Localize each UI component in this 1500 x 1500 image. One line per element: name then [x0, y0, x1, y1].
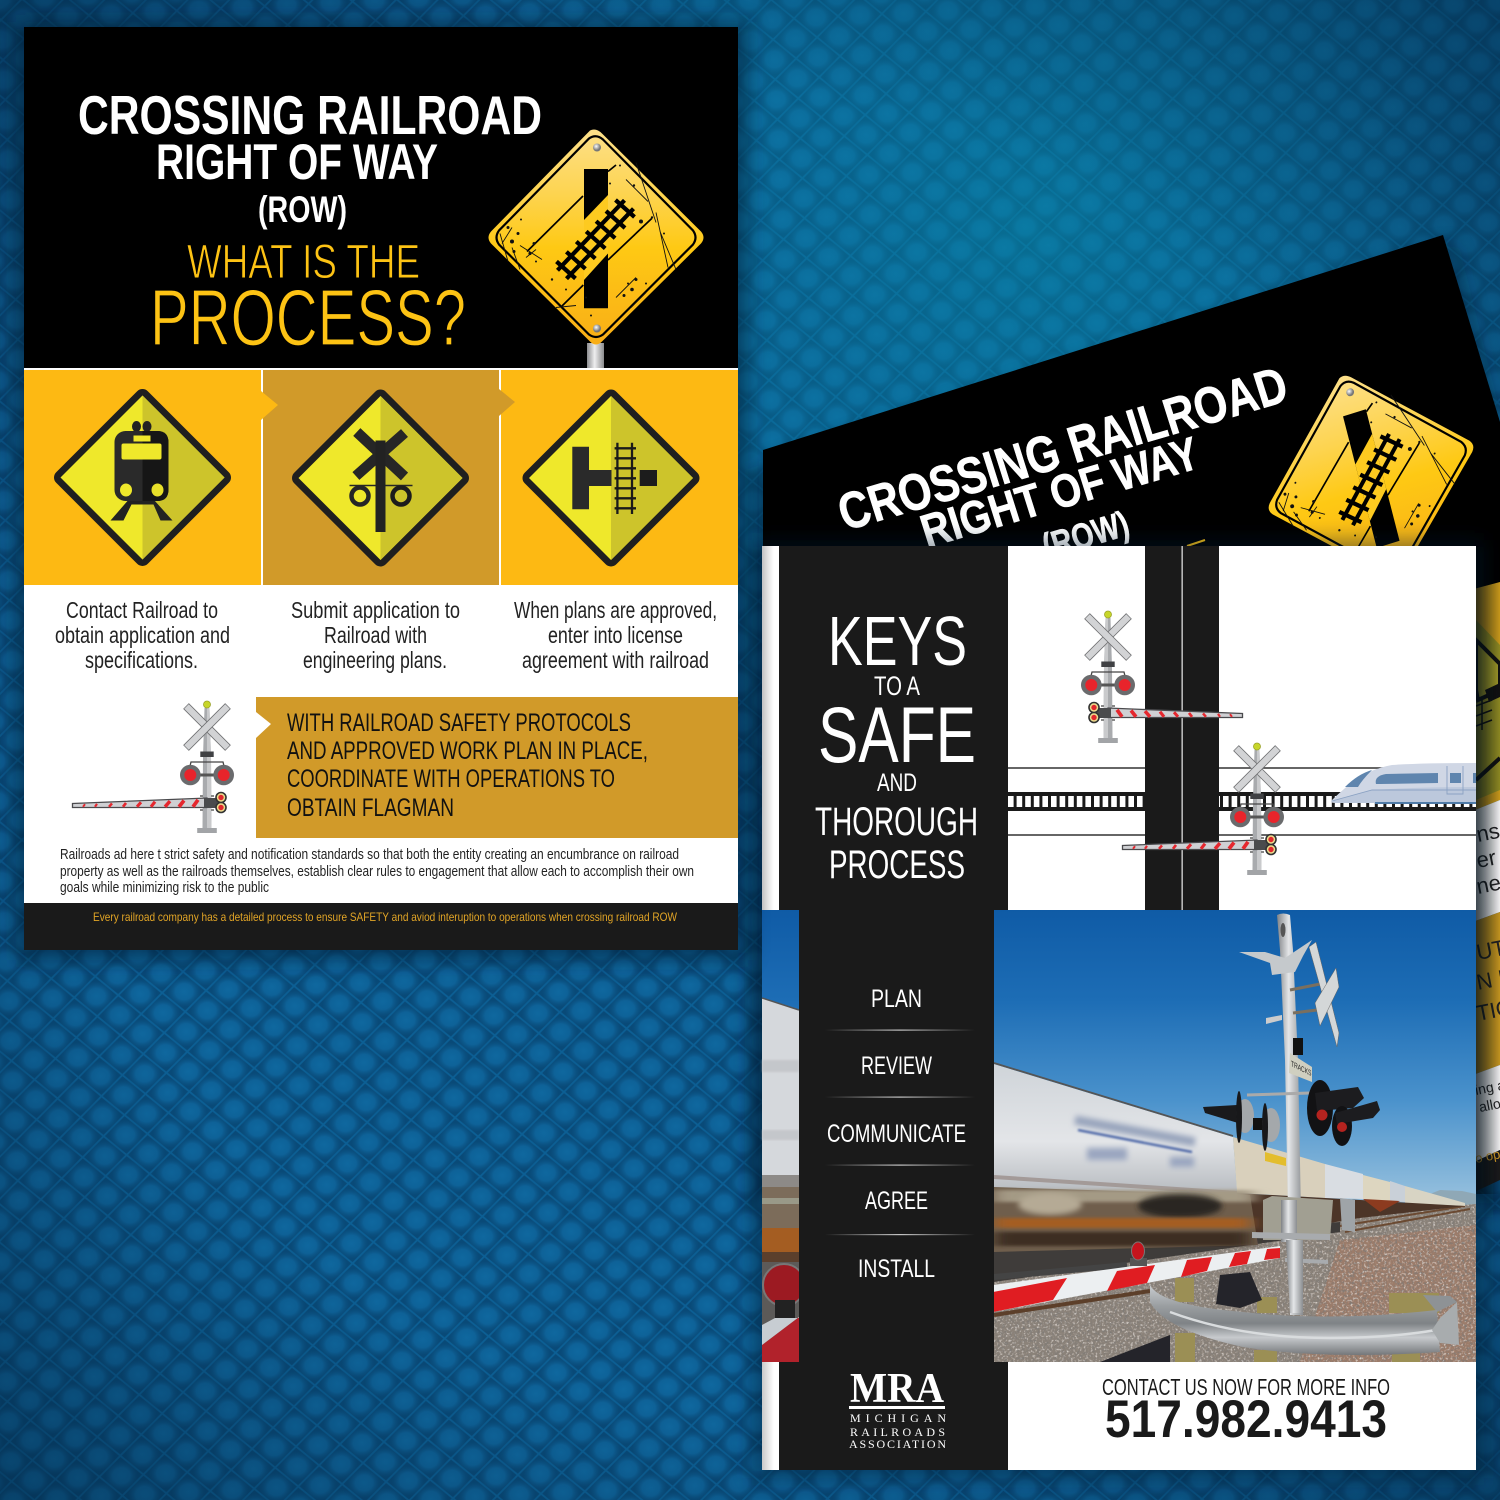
heading: keys to a safe and thorough process: PROCESS	[829, 843, 965, 887]
photo: train passing crossing, left sliver	[762, 910, 805, 1362]
control box and brackets	[1252, 1196, 1355, 1313]
signal mast	[1203, 914, 1380, 1315]
process steps list: COMMUNICATE	[827, 1120, 966, 1148]
text: safety paragraph: property as well as the railroads themselves, establish clear rules to engagement that allow each to accomplish their own	[60, 863, 694, 880]
heading: keys to a safe and thorough process: KEYS	[828, 602, 967, 680]
text: step 3: When plans are approved,	[514, 597, 717, 623]
callout: flagman banner: OBTAIN FLAGMAN	[287, 794, 454, 822]
text: step 2: engineering plans.	[303, 647, 447, 673]
photo: train passing crossing	[993, 910, 1476, 1362]
step panels	[24, 370, 738, 585]
icon: railroad crossing sign	[298, 396, 462, 560]
left signal lamps	[1203, 1091, 1280, 1151]
heading: what is the process: WHAT IS THE	[187, 236, 420, 289]
process steps list	[825, 985, 975, 1283]
shadow on ground	[1100, 1272, 1262, 1362]
tilted poster road sign	[1243, 344, 1499, 610]
heading: keys to a safe and thorough process: AND	[877, 769, 917, 797]
sidebar over photo	[799, 910, 994, 1362]
logo: Michigan Railroads Association: MICHIGAN	[850, 1411, 946, 1425]
logo: Michigan Railroads Association: RAILROADS	[850, 1425, 945, 1439]
railway track band	[1008, 792, 1476, 811]
footer bar	[24, 903, 738, 950]
contact block: CONTACT US NOW FOR MORE INFO	[1102, 1374, 1390, 1400]
callout: flagman banner: WITH RAILROAD SAFETY PROTOCOLS	[287, 709, 631, 737]
icon: road sign on post	[488, 130, 704, 368]
heading: keys to a safe and thorough process: SAFE	[818, 690, 976, 779]
text: step 1: Contact Railroad to	[66, 597, 218, 623]
text: step 3	[514, 597, 717, 673]
text: safety paragraph: goals while minimizing risk to the public	[60, 879, 269, 896]
heading: keys to a safe and thorough process: TO A	[874, 671, 920, 701]
arrow: step 2 to step 3	[499, 389, 515, 416]
tilted poster title	[831, 355, 1294, 567]
guard rail	[1150, 1285, 1459, 1355]
tilted poster title: RIGHT OF WAY	[914, 427, 1205, 558]
logo: Michigan Railroads Association: ASSOCIATION	[849, 1437, 946, 1451]
blurred freight train	[994, 1063, 1465, 1252]
heading: what is the process	[150, 236, 466, 362]
heading: crossing railroad right of way: (ROW)	[258, 189, 347, 230]
heading: keys to a safe and thorough process	[815, 602, 978, 887]
callout: flagman banner: COORDINATE WITH OPERATIONS TO	[287, 765, 615, 793]
footer bar: Every railroad company has a detailed process to ensure SAFETY and aviod interuption to operations when crossing railroad ROW	[93, 910, 678, 924]
text: step 2: Railroad with	[324, 622, 427, 648]
heading: crossing railroad right of way: CROSSING RAILROAD	[78, 84, 542, 146]
panel: tilted back poster	[752, 235, 1500, 1210]
process steps list: REVIEW	[861, 1052, 932, 1080]
dark vertical band	[1145, 546, 1219, 910]
railway scene illustration	[1008, 763, 1476, 835]
number of tracks sign	[1289, 1038, 1312, 1082]
panel: main poster	[16, 22, 748, 960]
logo: Michigan Railroads Association	[849, 1366, 946, 1451]
icon: crossing signal left	[1081, 611, 1242, 743]
number of tracks sign: TRACKS	[1291, 1059, 1311, 1078]
right signal lamps	[1307, 1080, 1380, 1146]
contact block: 517.982.9413	[1105, 1390, 1387, 1449]
icon: train warning sign	[60, 396, 224, 560]
logo: Michigan Railroads Association: MRA	[850, 1366, 945, 1412]
icon: side road and track sign	[529, 396, 693, 560]
text: safety paragraph: Railroads ad here t strict safety and notification standards so that both the entity creating an encumbrance on railroad	[60, 846, 679, 863]
right edge strip of back poster	[1470, 582, 1500, 1194]
callout: flagman banner: AND APPROVED WORK PLAN IN PLACE,	[287, 737, 648, 765]
text: step 2	[291, 597, 460, 673]
callout: flagman banner	[256, 697, 738, 838]
text: step 1: specifications.	[85, 647, 198, 673]
ground and gravel	[994, 1204, 1476, 1362]
heading: crossing railroad right of way: RIGHT OF WAY	[156, 134, 438, 190]
text: step 2: Submit application to	[291, 597, 460, 623]
panel: dark sidebar	[779, 546, 1008, 1470]
text: step 3: enter into license	[548, 622, 683, 648]
crossbuck sign	[1309, 942, 1339, 1047]
heading: crossing railroad right of way	[78, 84, 542, 230]
process steps list: PLAN	[871, 985, 922, 1013]
text: step 3: agreement with railroad	[522, 647, 709, 673]
heading: what is the process: PROCESS?	[150, 273, 466, 362]
text: step 1	[55, 597, 230, 673]
tilted poster title: (ROW)	[1037, 503, 1134, 567]
panel: front process poster	[752, 540, 1484, 1478]
text: step 1: obtain application and	[55, 622, 230, 648]
process steps list: AGREE	[865, 1187, 928, 1215]
wooden posts	[1175, 1278, 1439, 1362]
icon: crossing signal with gate	[72, 701, 234, 833]
text: safety paragraph	[60, 846, 694, 896]
high speed train	[1331, 763, 1476, 803]
arrow: step 1 to step 2	[261, 391, 278, 420]
icon: crossing signal right	[1122, 743, 1284, 875]
process steps list: INSTALL	[858, 1255, 935, 1283]
heading: keys to a safe and thorough process: THOROUGH	[815, 800, 978, 844]
crossing gate arm	[993, 1242, 1280, 1315]
tilted poster title: CROSSING RAILROAD	[831, 355, 1294, 541]
